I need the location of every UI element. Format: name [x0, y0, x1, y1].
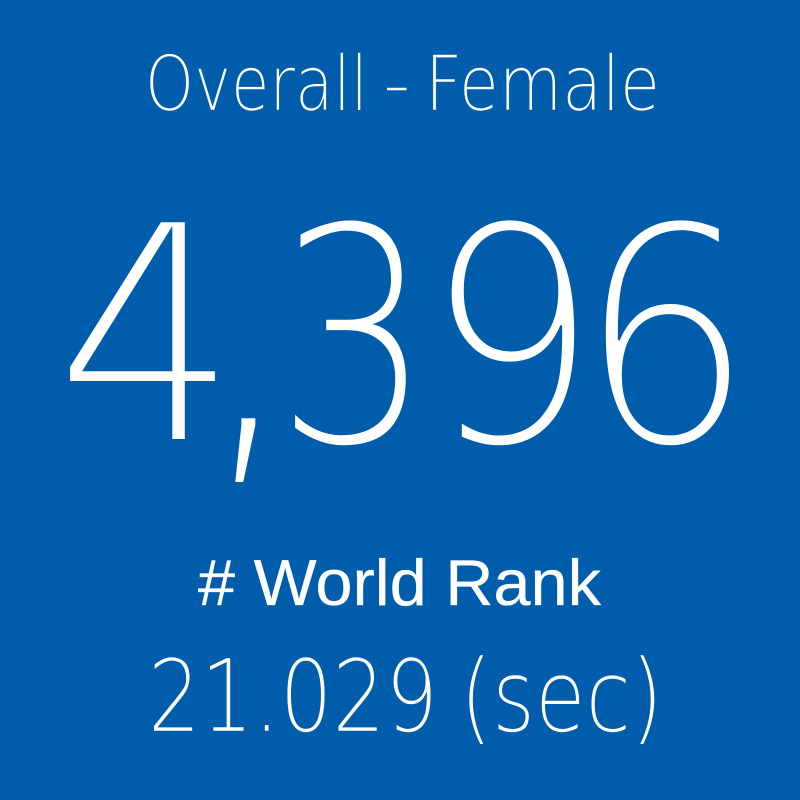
time value: 21.029 [148, 638, 438, 755]
big number [55, 98, 754, 528]
big number: 9 [424, 164, 599, 513]
title: Overall [145, 39, 368, 128]
title [145, 39, 660, 128]
title: - [383, 39, 410, 128]
big number: 3 [276, 164, 432, 513]
big number: 6 [578, 164, 754, 513]
metric label: # World Rank [198, 546, 602, 619]
time value [148, 638, 663, 755]
title: Female [425, 39, 660, 128]
big number: 4 [55, 162, 239, 511]
big number: , [198, 98, 299, 528]
time value: (sec) [460, 638, 663, 755]
